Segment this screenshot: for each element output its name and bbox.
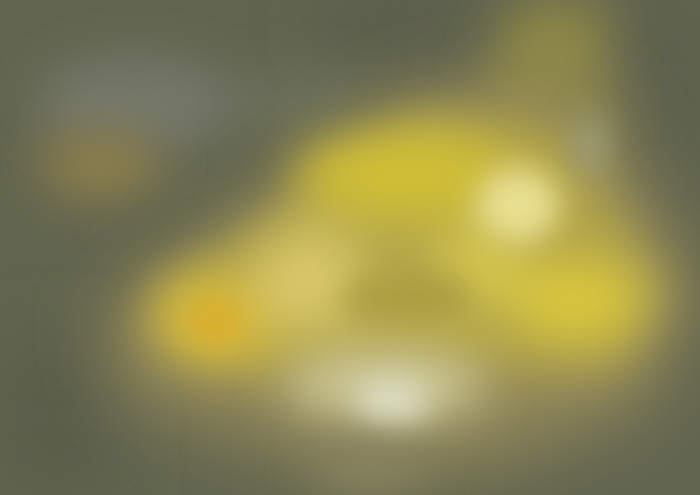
main triangular glow: [150, 115, 665, 375]
pale halo bottom: [285, 349, 485, 421]
orange spot left: [187, 300, 243, 344]
bottom stem: [310, 442, 430, 494]
yellow core: [150, 133, 640, 365]
brown spot: [38, 131, 162, 199]
tan halo: [100, 90, 700, 470]
central olive hollow: [344, 270, 472, 330]
top right arm: [465, 0, 610, 130]
grey patch top left: [35, 57, 370, 153]
pale highlight upper right: [476, 113, 606, 243]
white highlight bottom: [356, 380, 428, 424]
